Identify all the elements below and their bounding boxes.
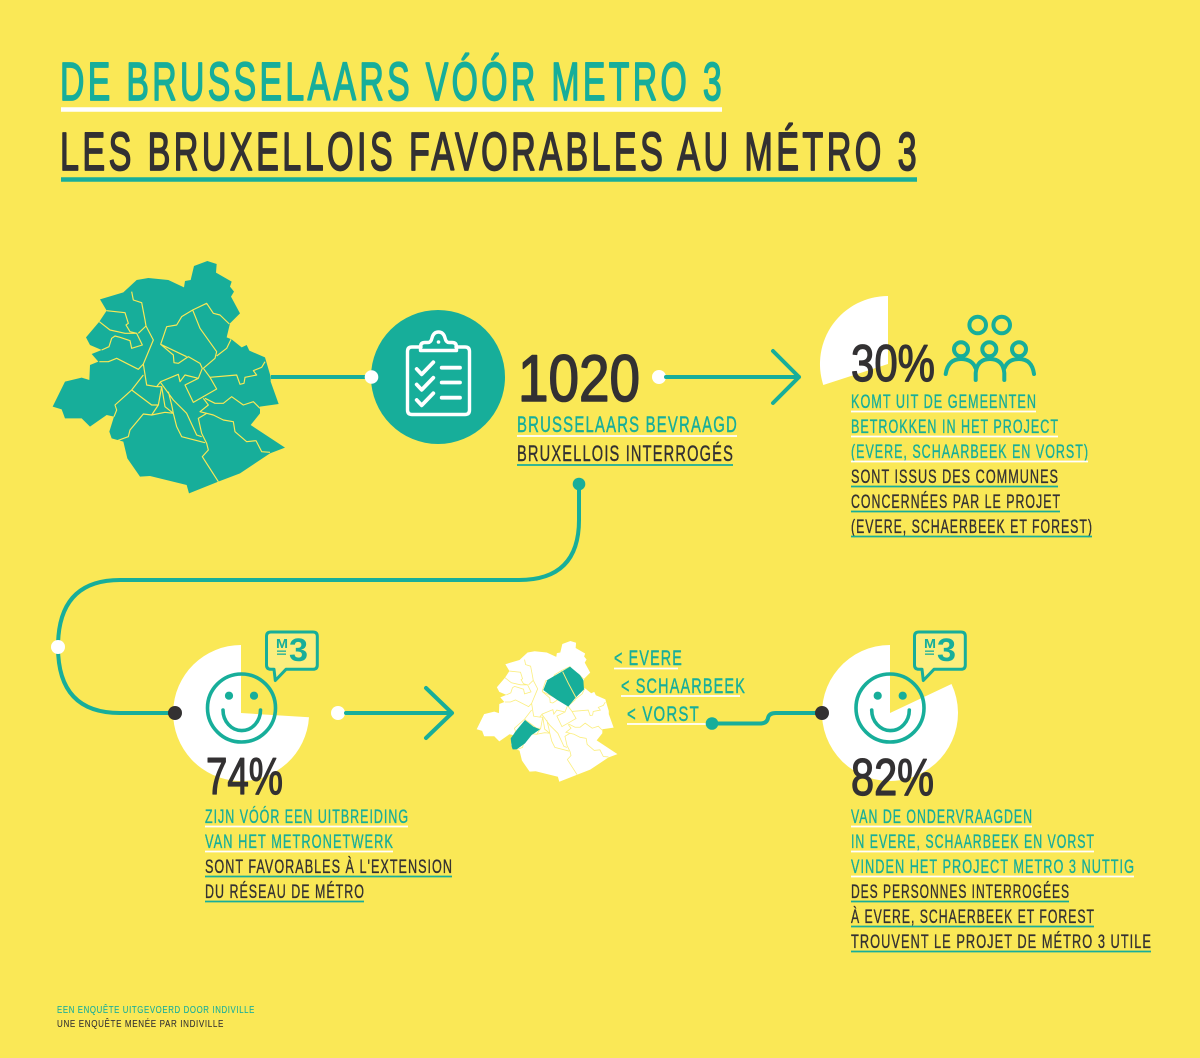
footer: survey credit: UNE ENQUÊTE MENÉE PAR INDIVILLE xyxy=(57,1017,224,1030)
connector: map to survey icon xyxy=(271,370,378,384)
connector: Vorst to 82 percent xyxy=(706,713,822,730)
number: 74%: 74% xyxy=(206,748,283,806)
pie: 30 percent xyxy=(820,296,888,385)
text block: 82 percent explanation xyxy=(851,807,1152,953)
connector: curved line from 1020 to 74 percent xyxy=(58,484,579,713)
text block: 30 percent explanation: KOMT UIT DE GEMEENTEN xyxy=(851,392,1037,413)
connector dot: 74 percent xyxy=(168,706,182,720)
icon: M3 speech bubble left: M xyxy=(276,636,288,651)
text block: 74 percent explanation: DU RÉSEAU DE MÉTRO xyxy=(205,882,365,903)
text block: 82 percent explanation: DES PERSONNES INTERROGÉES xyxy=(851,882,1070,903)
pie: 74 percent xyxy=(173,645,309,781)
arrow: to small map xyxy=(331,688,452,738)
text block: 74 percent explanation: ZIJN VÓÓR EEN UITBREIDING xyxy=(205,806,409,828)
icon: M3 speech bubble left: 3 xyxy=(289,632,308,668)
text block: 30 percent explanation: CONCERNÉES PAR LE PROJET xyxy=(851,492,1061,513)
text block: 74 percent explanation xyxy=(205,806,453,903)
text block: 74 percent explanation: VAN HET METRONETWERK xyxy=(205,832,394,853)
footer: survey credit: EEN ENQUÊTE UITGEVOERD DOOR INDIVILLE xyxy=(57,1003,255,1016)
text block: 30 percent explanation: SONT ISSUS DES COMMUNES xyxy=(851,467,1059,488)
labels: highlighted communes: < VORST xyxy=(627,702,700,726)
title: Dutch: DE BRUSSELAARS VÓÓR METRO 3 xyxy=(60,52,725,112)
text block: 74 percent explanation: SONT FAVORABLES À L'EXTENSION xyxy=(205,857,453,878)
text block: 30 percent explanation: BETROKKEN IN HET PROJECT xyxy=(851,417,1059,438)
map of Brussels communes xyxy=(53,261,285,493)
icon: M3 speech bubble right: 3 xyxy=(937,632,956,668)
connector dot: top xyxy=(573,478,585,490)
icon: M3 speech bubble left xyxy=(266,632,317,680)
number: 82%: 82% xyxy=(851,749,934,807)
stat: 1020 respondents xyxy=(517,341,738,466)
connector dot: middle xyxy=(51,640,65,654)
icon: group of people xyxy=(946,317,1034,380)
stat: 1020 respondents: 1020 xyxy=(518,341,640,415)
small map with highlighted communes xyxy=(477,641,617,782)
stat: 1020 respondents: BRUXELLOIS INTERROGÉS xyxy=(517,441,734,466)
number: 30%: 30% xyxy=(851,335,935,393)
labels: highlighted communes: < EVERE xyxy=(614,646,683,670)
text block: 82 percent explanation: VAN DE ONDERVRAAGDEN xyxy=(851,807,1033,828)
icon: clipboard checklist xyxy=(371,310,505,444)
labels: highlighted communes: < SCHAARBEEK xyxy=(621,674,746,698)
arrow: to 30 percent xyxy=(652,351,799,403)
text block: 30 percent explanation xyxy=(851,392,1093,538)
connector dot: 82 percent xyxy=(815,706,829,720)
footer: survey credit xyxy=(57,1003,255,1030)
icon: smiley 82 percent xyxy=(856,674,924,742)
icon: M3 speech bubble right xyxy=(914,632,965,680)
stat: 1020 respondents: BRUSSELAARS BEVRAAGD xyxy=(517,412,738,437)
pie: 82 percent xyxy=(822,645,958,781)
labels: highlighted communes xyxy=(614,646,746,726)
icon: smiley 74 percent xyxy=(208,674,276,742)
icon: M3 speech bubble right: M xyxy=(924,636,936,651)
